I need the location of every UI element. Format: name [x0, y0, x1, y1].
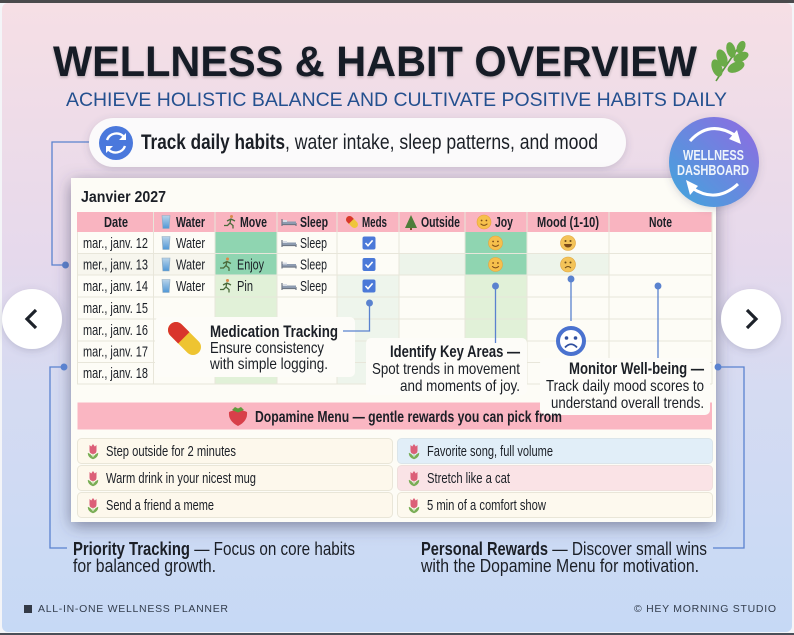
table entries: Pin — [237, 279, 253, 295]
table dates: mer., janv. 13 — [83, 258, 148, 274]
table dates: mar., janv. 18 — [83, 366, 148, 382]
dopamine menu items: right column: Favorite song, full volume — [427, 443, 553, 460]
table header row: Sleep — [300, 215, 328, 231]
table entries: Sleep — [300, 258, 327, 274]
icon: pill — [165, 319, 204, 358]
table entries: Sleep — [300, 279, 327, 295]
callout: medication tracking: Medication Tracking — [210, 322, 338, 341]
callout: monitor well-being — [546, 276, 704, 412]
table header row: Note — [649, 215, 672, 231]
callout: medication tracking — [155, 300, 372, 377]
footer left: ALL-IN-ONE WELLNESS PLANNER — [38, 603, 228, 615]
callout: track daily habits: Track daily habits — [141, 131, 285, 154]
button: next arrow — [721, 289, 781, 349]
table dates: mar., janv. 12 — [83, 236, 148, 252]
dopamine menu items: left column: Warm drink in your nicest mug — [106, 470, 256, 487]
icon: leaf sprig — [709, 39, 750, 81]
table entries: Water — [176, 258, 205, 274]
connector: personal rewards — [713, 364, 744, 548]
dopamine menu banner — [78, 358, 712, 430]
callout: monitor well-being: understand overall trends. — [551, 395, 704, 412]
connector: track habits to table — [52, 142, 97, 268]
icon: strawberry — [229, 407, 247, 426]
button: previous arrow — [2, 289, 62, 349]
callout: medication tracking: Ensure consistency — [210, 340, 324, 357]
callout: identify key areas: Spot trends in movement — [372, 361, 520, 378]
badge: wellness dashboard — [669, 117, 759, 207]
subtitle: ACHIEVE HOLISTIC BALANCE AND CULTIVATE POSITIVE HABITS DAILY — [66, 89, 727, 111]
table header row: Outside — [421, 215, 460, 231]
callout box overlap: monitor well-being — [540, 358, 710, 415]
dopamine menu items: left column: Send a friend a meme — [106, 497, 214, 514]
table dates: mar., janv. 14 — [83, 279, 148, 295]
table dates — [83, 236, 148, 382]
dopamine menu items: left column — [78, 438, 392, 518]
table header row: Date — [104, 215, 128, 231]
dopamine menu banner: Dopamine Menu — gentle rewards you can pick from — [255, 409, 562, 426]
table dates: mar., janv. 15 — [83, 301, 148, 317]
callout: monitor well-being: Track daily mood scores to — [546, 378, 704, 395]
connector: priority tracking — [50, 364, 67, 548]
panel: planner card — [2, 117, 781, 615]
table dates: mar., janv. 17 — [83, 344, 148, 360]
footer right: © HEY MORNING STUDIO — [634, 603, 776, 615]
callout: identify key areas: and moments of joy. — [400, 378, 520, 395]
dopamine menu items: left column: Step outside for 2 minutes — [106, 443, 236, 460]
table header row: Meds — [362, 215, 387, 231]
text: personal rewards: with the Dopamine Menu for motivation. — [420, 556, 699, 576]
table entries: Enjoy — [237, 258, 265, 274]
callout: track daily habits — [89, 118, 626, 167]
dopamine menu items: right column: 5 min of a comfort show — [427, 497, 546, 514]
badge: wellness dashboard: WELLNESS — [683, 147, 744, 164]
dopamine menu items: right column — [398, 438, 712, 518]
table header row — [104, 215, 672, 231]
month heading: Janvier 2027 — [81, 189, 166, 206]
text: priority tracking: Priority Tracking — [73, 539, 190, 559]
table entries — [162, 236, 576, 295]
table dates: mar., janv. 16 — [83, 323, 148, 339]
callout: monitor well-being: Monitor Well-being — — [569, 359, 704, 378]
table header row: Joy — [495, 215, 513, 231]
dopamine menu items: right column: Stretch like a cat — [427, 470, 511, 487]
text: personal rewards — [420, 539, 707, 576]
callout: medication tracking: with simple logging. — [209, 356, 328, 373]
text: personal rewards: — Discover small wins — [548, 539, 707, 559]
callout: identify key areas: Identify Key Areas — — [390, 342, 520, 361]
table entries: Sleep — [300, 236, 327, 252]
table header row: Water — [176, 215, 205, 231]
text: priority tracking: for balanced growth. — [73, 556, 216, 576]
table header row: Mood (1-10) — [537, 215, 599, 231]
badge: wellness dashboard: DASHBOARD — [677, 162, 749, 179]
callout: track daily habits: , water intake, sleep patterns, and mood — [285, 131, 598, 154]
icon: sad face — [558, 328, 584, 354]
table entries: Water — [176, 279, 205, 295]
callout: identify key areas — [366, 283, 527, 395]
table entries: Water — [176, 236, 205, 252]
text: priority tracking — [73, 539, 355, 576]
text: personal rewards: Personal Rewards — [421, 539, 548, 559]
habit table — [77, 212, 712, 384]
text: priority tracking: — Focus on core habits — [190, 539, 355, 559]
title: WELLNESS & HABIT OVERVIEW — [53, 38, 697, 86]
table header row: Move — [240, 215, 267, 231]
icon: refresh — [99, 126, 133, 160]
